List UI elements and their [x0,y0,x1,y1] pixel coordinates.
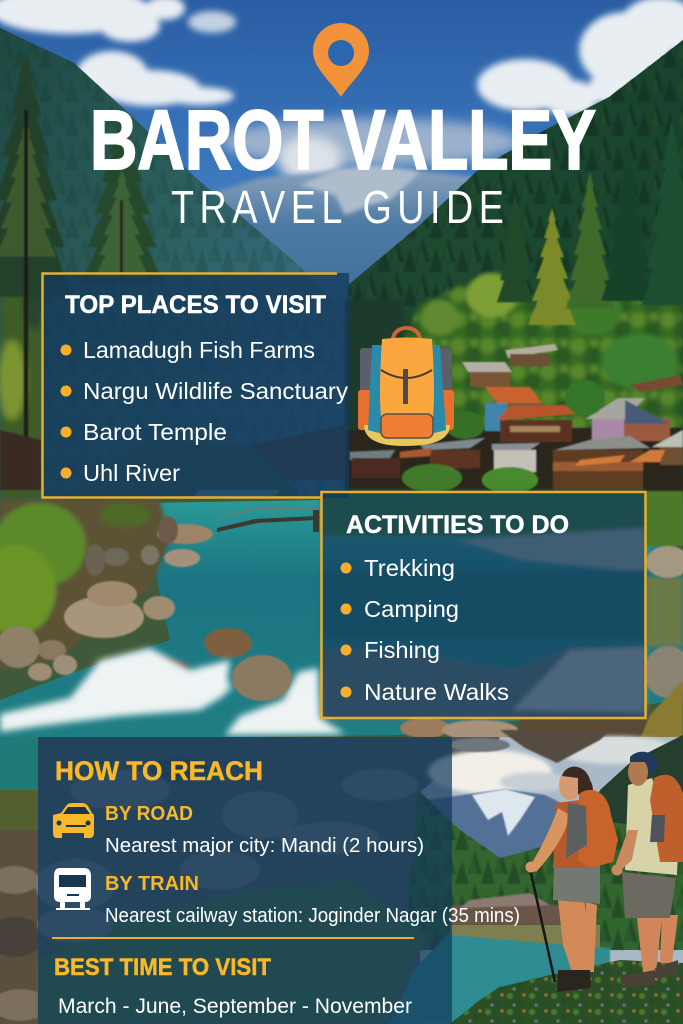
best time text: March - June, September - November [58,995,412,1018]
subtitle: TRAVEL GUIDE [171,181,504,233]
forest reflection and far bank [321,491,683,720]
by train heading: BY TRAIN [105,873,199,895]
hikers [526,752,683,992]
lower photo inset: hikers scene [35,730,683,1024]
lower left bank [0,737,40,797]
river bed [0,497,683,740]
woman hiker [526,767,618,992]
by train text: Nearest cailway station: Joginder Nagar (35 mins) [105,905,520,927]
dark green lower part of panel scene [38,880,430,1024]
bright trees above village [402,120,683,430]
panel: activities to do: Camping [364,596,459,622]
heading: how to reach: HOW TO REACH [55,756,263,786]
panel: top places to visit: Uhl River [83,460,180,486]
panel: top places to visit: Nargu Wildlife Sanctuary [83,378,349,404]
bridge [217,508,319,532]
inset forest slopes [405,790,683,950]
boulder in rapids [232,655,292,701]
village houses [345,300,683,496]
panel: activities to do: Nature Walks [364,679,509,705]
panel: activities to do: Fishing [364,637,440,663]
dark boulders [35,738,510,943]
inset village [450,893,560,925]
by road text: Nearest major city: Mandi (2 hours) [105,835,424,857]
river rocks [0,516,252,681]
title pin icon [313,23,369,97]
lower rocks and flowers right [400,491,683,740]
snowy mountains [170,165,500,330]
panel: activities to do: ACTIVITIES TO DO [346,511,569,539]
haze clouds behind title [220,118,520,184]
panel: activities to do: Trekking [364,555,455,581]
man hiker [612,752,683,988]
inset sky and clouds [420,737,683,1024]
inverted rock overhang [500,730,610,763]
panel: top places to visit [41,273,349,498]
icon: train [54,868,91,910]
sky [0,0,683,300]
tall pine trees [0,53,164,490]
by road heading: BY ROAD [105,803,193,825]
rocky foreground band [38,737,683,1024]
right forest slope [345,40,683,500]
icon: car [53,803,94,838]
inset river [390,932,610,1024]
panel: top places to visit: Lamadugh Fish Farms [83,337,315,363]
houses visible under panel [60,425,345,500]
left forest slope [0,28,352,510]
panel: top places to visit: Barot Temple [83,419,227,445]
panel: how to reach and best time [38,737,520,1024]
far left sunlit trees [0,250,44,500]
inset snowy peaks [425,789,585,870]
left bank greenery [0,500,170,670]
panel: activities to do [321,491,646,718]
flowered meadow foreground [450,960,683,1024]
icon: backpack [358,328,454,446]
clouds [0,0,683,116]
heading: best time to visit: BEST TIME TO VISIT [54,954,271,981]
rapids [0,648,345,735]
panel: top places to visit: TOP PLACES TO VISIT [65,291,326,319]
inset right mountain [575,735,683,900]
